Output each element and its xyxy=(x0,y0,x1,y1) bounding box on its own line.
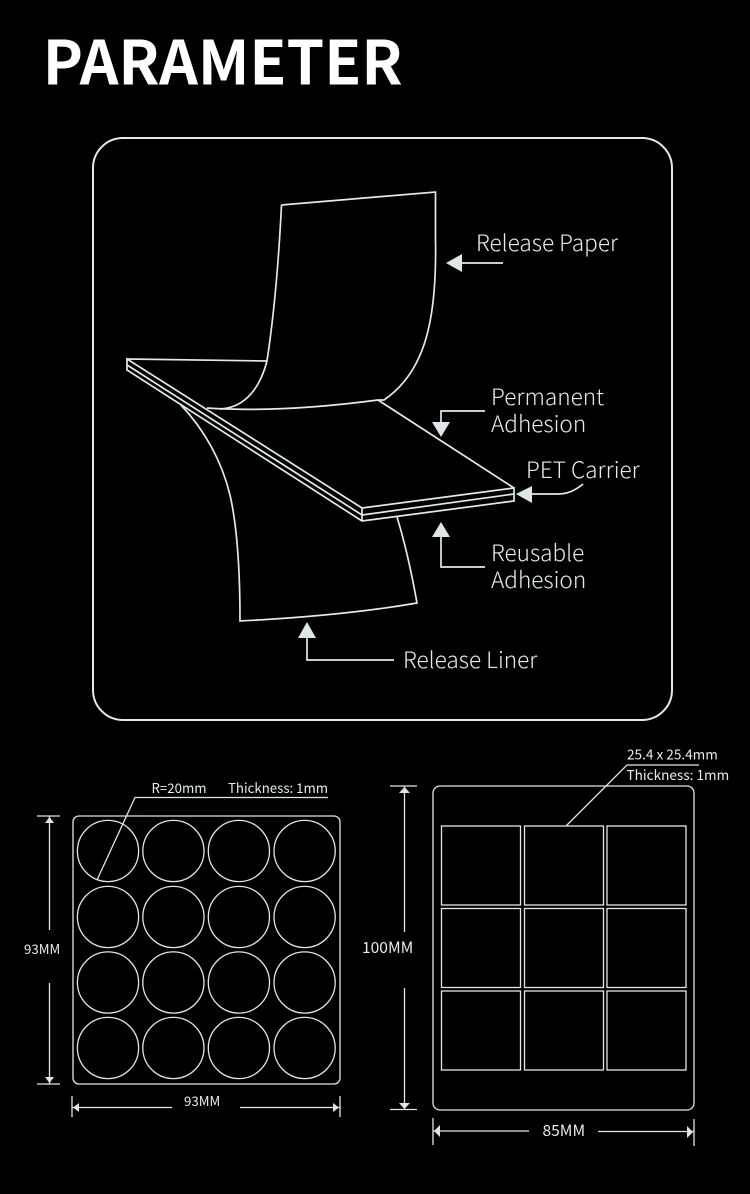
dimension: width 85MM: 85MM xyxy=(542,1119,585,1141)
diagram: circle sheet xyxy=(24,778,340,1117)
label: permanent adhesion: Adhesion xyxy=(491,406,586,439)
dimension: height 93MM xyxy=(24,816,60,1084)
label: permanent adhesion: Permanent xyxy=(491,379,604,412)
dimension: height 100MM: 100MM xyxy=(362,936,413,958)
label: release liner: Release Liner xyxy=(403,642,538,675)
label: reusable adhesion: Reusable xyxy=(491,535,584,568)
label: release liner xyxy=(298,622,538,675)
label: PET carrier xyxy=(516,452,641,503)
diagram: square sheet xyxy=(362,744,729,1146)
dimension: height 93MM: 93MM xyxy=(24,939,60,958)
dimension: width 93MM: 93MM xyxy=(184,1091,220,1110)
callout: radius and thickness: Thickness: 1mm xyxy=(228,778,328,797)
label: permanent adhesion xyxy=(432,379,604,439)
callout: radius and thickness xyxy=(97,778,328,880)
callout: size and thickness: Thickness: 1mm xyxy=(626,764,729,784)
title: PARAMETER xyxy=(43,16,403,102)
callout: size and thickness xyxy=(566,744,729,826)
label: release paper: Release Paper xyxy=(476,225,619,258)
circles grid xyxy=(77,820,335,1079)
label: reusable adhesion xyxy=(432,522,586,595)
callout: radius and thickness: R=20mm xyxy=(152,778,207,797)
label: reusable adhesion: Adhesion xyxy=(491,562,586,595)
squares grid xyxy=(442,826,686,1070)
dimension: height 100MM xyxy=(362,786,417,1110)
label: release paper xyxy=(446,225,619,272)
callout: size and thickness: 25.4 x 25.4mm xyxy=(627,744,718,764)
panel: layer structure xyxy=(93,138,672,720)
dimension: width 85MM xyxy=(433,1118,694,1146)
dimension: width 93MM xyxy=(72,1091,340,1117)
diagram: layered sheet xyxy=(127,192,514,621)
label: PET carrier: PET Carrier xyxy=(526,452,641,485)
